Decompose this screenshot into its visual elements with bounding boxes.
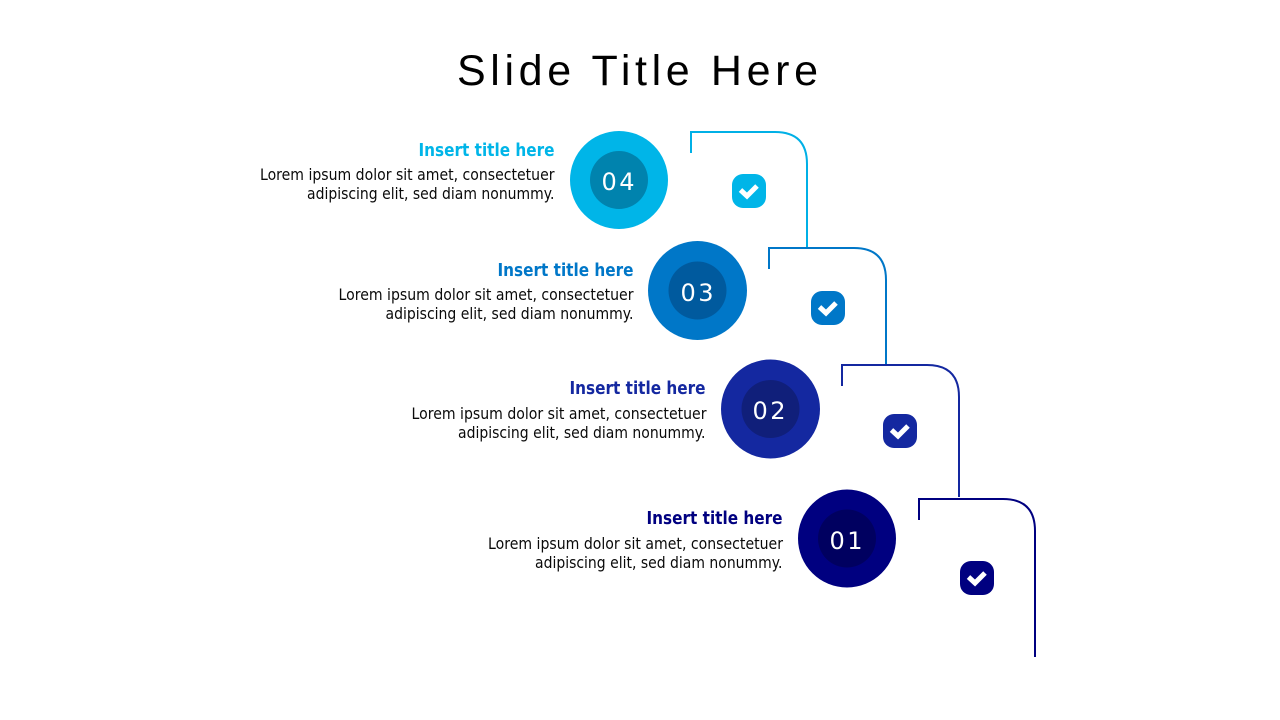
step 04 number badge: 04 bbox=[602, 168, 634, 196]
step 01 check icon bbox=[960, 561, 994, 595]
step 02 number badge bbox=[721, 360, 820, 458]
step 02 heading: Insert title here bbox=[570, 378, 706, 399]
step 04 bbox=[260, 131, 766, 229]
step 03 check icon bbox=[811, 291, 845, 325]
step 01 body text bbox=[488, 534, 783, 572]
step 01 body text: adipiscing elit, sed diam nonummy. bbox=[535, 553, 782, 572]
step 02 body text: Lorem ipsum dolor sit amet, consectetuer bbox=[412, 404, 707, 423]
step 03 number badge: 03 bbox=[680, 279, 714, 307]
title: Slide Title Here bbox=[457, 47, 818, 95]
step 04 body text: Lorem ipsum dolor sit amet, consectetuer bbox=[260, 165, 555, 184]
connector 01 bbox=[919, 499, 1035, 657]
connector 02 bbox=[842, 365, 959, 497]
step 04 body text bbox=[260, 165, 555, 203]
step 04 number badge bbox=[570, 131, 668, 229]
step 03 body text: Lorem ipsum dolor sit amet, consectetuer bbox=[338, 285, 634, 304]
connector 03 bbox=[769, 248, 886, 366]
step 04 check icon bbox=[732, 174, 766, 208]
step 02 number badge: 02 bbox=[752, 397, 786, 425]
step 03 bbox=[338, 241, 845, 340]
step 04 body text: adipiscing elit, sed diam nonummy. bbox=[307, 184, 554, 203]
step 03 number badge bbox=[648, 241, 747, 340]
step 03 body text: adipiscing elit, sed diam nonummy. bbox=[386, 304, 634, 323]
step 02 body text bbox=[412, 404, 707, 442]
step 02 body text: adipiscing elit, sed diam nonummy. bbox=[458, 423, 706, 442]
step 01 heading: Insert title here bbox=[646, 508, 782, 529]
step 02 bbox=[412, 360, 917, 458]
step 01 number badge bbox=[798, 490, 896, 588]
step 03 body text bbox=[338, 285, 634, 323]
step 01 bbox=[488, 490, 994, 595]
step 01 body text: Lorem ipsum dolor sit amet, consectetuer bbox=[488, 534, 783, 553]
connector 04 bbox=[691, 132, 807, 248]
step 02 check icon bbox=[883, 414, 917, 448]
step 04 heading: Insert title here bbox=[418, 140, 554, 161]
step 01 number badge: 01 bbox=[830, 527, 862, 555]
step 03 heading: Insert title here bbox=[498, 260, 634, 281]
